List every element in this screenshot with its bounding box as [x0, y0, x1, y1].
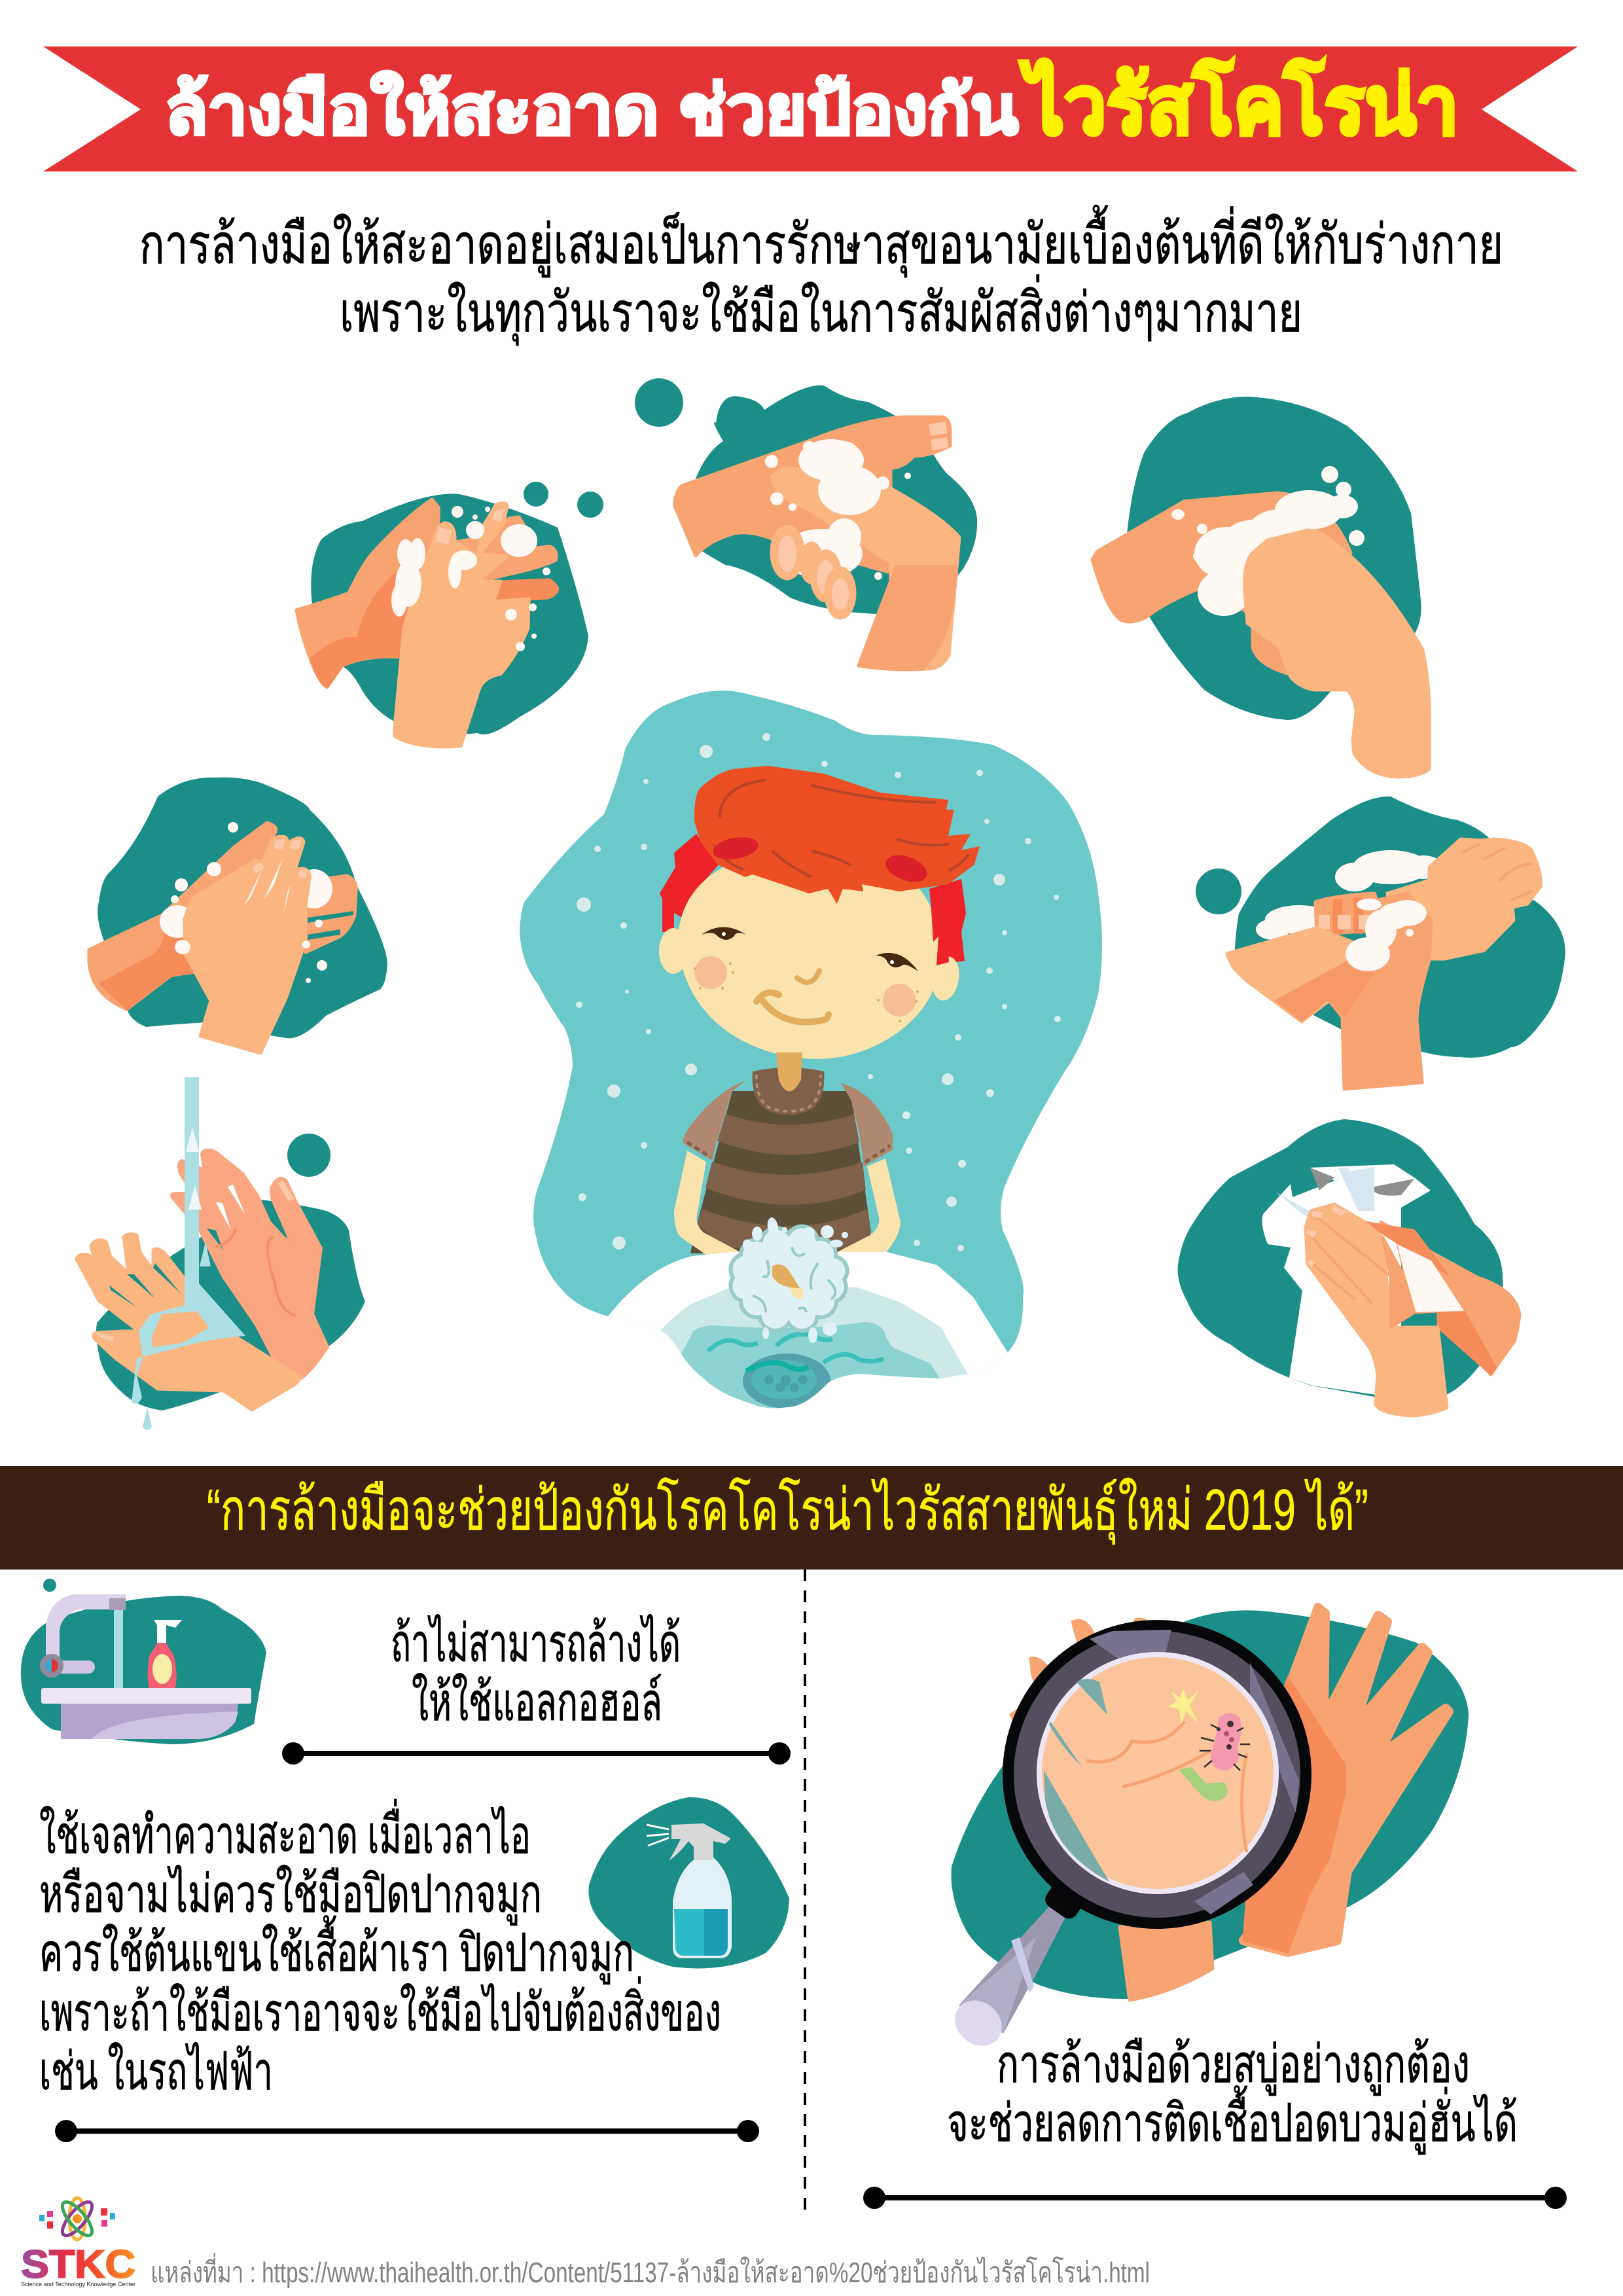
paragraph: cough etiquette: เช่น ในรถไฟฟ้า	[39, 2041, 273, 2100]
logo tagline: Science and Technology Knowledge Center	[21, 2281, 135, 2287]
logo atom mark	[39, 2198, 115, 2240]
title text yellow: ไวรัสโคโรน่า	[1020, 59, 1459, 151]
illustration: washing wrist top right	[1092, 397, 1429, 777]
illustration: drying hands with towel	[1178, 1119, 1520, 1416]
foam around hands	[730, 1217, 848, 1343]
illustration: rubbing fingers top centre	[635, 378, 977, 670]
source text: แหล่งที่มา : https://www.thaihealth.or.th/Content/51137-ล้างมือให้สะอาด%20ช่วยป้องกันไวรัสโคโรน่า.html	[151, 2252, 1150, 2289]
text: use alcohol	[391, 1614, 681, 1731]
arms	[674, 1151, 901, 1281]
paragraph: cough etiquette: ใช้เจลทำความสะอาด เมื่อเวลาไอ	[39, 1799, 531, 1864]
quote bar	[0, 1466, 1623, 1570]
illustration: rinsing hands under water	[77, 1077, 365, 1430]
text: use alcohol: ให้ใช้แอลกอฮอล์	[412, 1672, 662, 1731]
illustration: rubbing hands top left	[296, 482, 603, 747]
title text white: ล้างมือให้สะอาด ช่วยป้องกัน	[165, 71, 1018, 149]
paragraph: cough etiquette	[39, 1799, 721, 2100]
teal background blob	[520, 691, 1102, 1408]
shirt	[683, 1067, 893, 1253]
text: soap reduces infection	[947, 2035, 1518, 2155]
divider line three	[863, 2187, 1567, 2209]
illustration: rubbing back of hand left	[89, 778, 387, 1053]
icon: sink with soap	[21, 1579, 266, 1744]
text: use alcohol: ถ้าไม่สามารถล้างได้	[391, 1614, 681, 1672]
paragraph: cough etiquette: ควรใช้ต้นแขนใช้เสื้อผ้าเรา ปิดปากจมูก	[39, 1915, 634, 1984]
icon: spray bottle	[588, 1797, 789, 1968]
sink	[608, 1251, 1008, 1408]
divider line two	[55, 2120, 759, 2142]
logo: STKC	[21, 2198, 135, 2287]
logo word: STKC	[21, 2242, 135, 2286]
illustration: hands gripping wrist right	[1196, 797, 1565, 1089]
divider line one	[282, 1742, 791, 1765]
intro text: เพราะในทุกวันเราจะใช้มือในการสัมผัสสิ่งต่างๆมากมาย	[340, 274, 1302, 346]
illustration: magnifier over hand with germs	[946, 1607, 1469, 2055]
paragraph: cough etiquette: เพราะถ้าใช้มือเราอาจจะใช้มือไปจับต้องสิ่งของ	[39, 1977, 721, 2041]
paragraph: cough etiquette: หรือจามไม่ควรใช้มือปิดปากจมูก	[39, 1864, 542, 1926]
soap bubbles	[576, 733, 1061, 1251]
illustration: boy washing hands	[520, 691, 1102, 1414]
head and hair	[659, 766, 980, 1092]
intro text	[139, 205, 1503, 346]
title banner	[43, 46, 1578, 171]
